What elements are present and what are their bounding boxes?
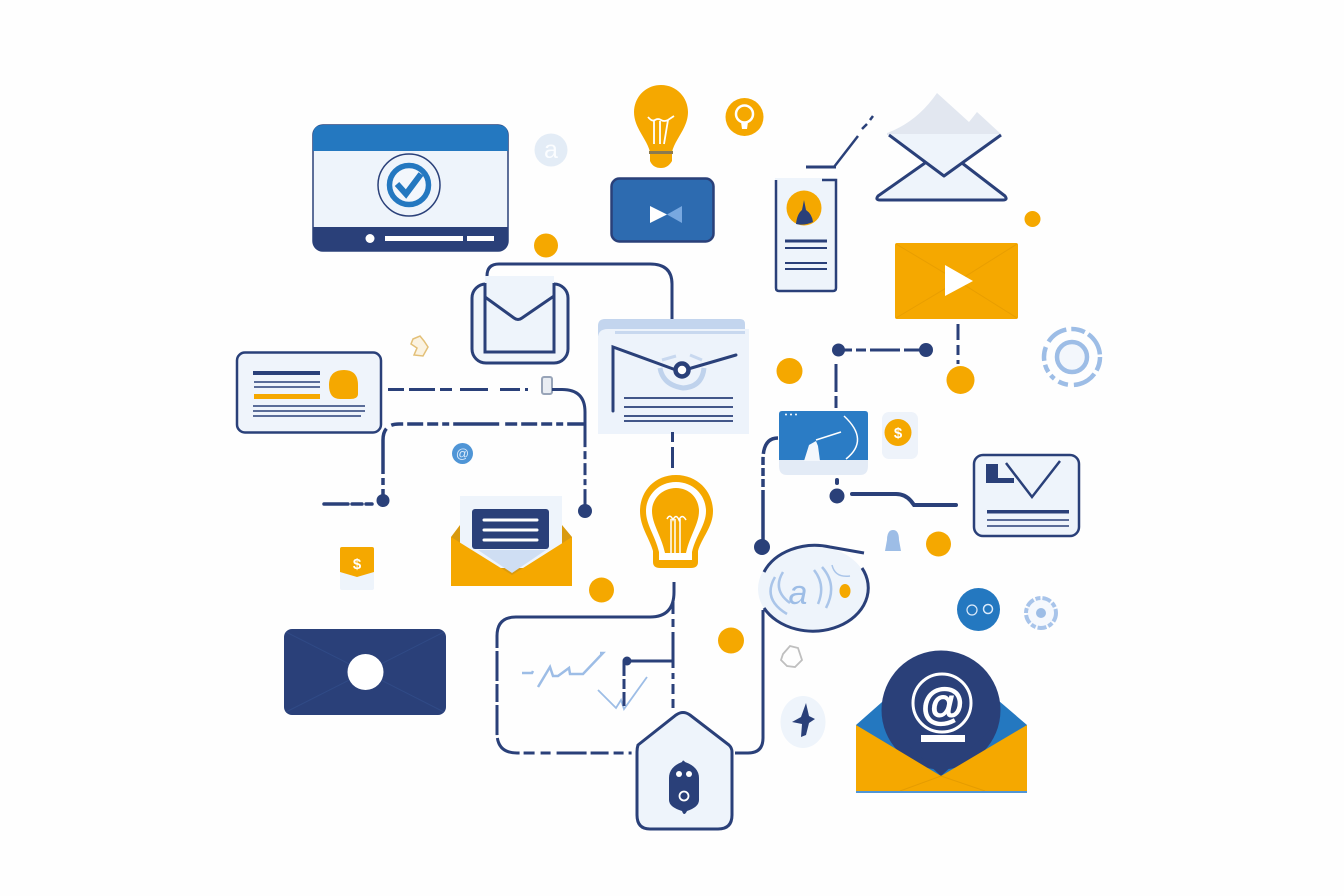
orange dot <box>946 366 974 394</box>
icon: outlined orange bulb <box>640 475 713 568</box>
icon: small plug <box>542 377 552 394</box>
icon: ring target <box>1044 329 1100 385</box>
connector: house to speech bubble <box>735 610 763 753</box>
panel: blue picture tile <box>779 411 868 475</box>
panel: profile card with orange avatar <box>237 352 381 432</box>
connector: horizontal node line <box>832 343 933 408</box>
panel: orange play envelope <box>895 243 1018 319</box>
orange dot <box>534 234 558 258</box>
icon: pale at-sign badge <box>534 134 568 166</box>
panel: speech bubble with at sign <box>758 545 868 632</box>
icon: small blue lock <box>885 530 901 551</box>
panel: center envelope document <box>598 319 749 434</box>
connector: dashed loop to house <box>497 636 632 753</box>
node: left connector <box>324 494 390 507</box>
node: connector to check card <box>830 480 956 505</box>
icon: dollar tag <box>340 547 374 590</box>
icon: doodle grey <box>781 646 802 667</box>
node: plug line end <box>578 504 592 518</box>
orange dot <box>926 532 951 556</box>
connector: vertical dashed from bulb to house <box>672 602 674 708</box>
icon: dollar coin tile <box>882 412 918 459</box>
orange dot <box>718 628 744 654</box>
icon: house with plug <box>637 712 732 829</box>
connector: loop from left node <box>383 424 585 500</box>
icon: tiny gold doodle <box>411 336 428 356</box>
icon: outlined envelope card <box>472 276 568 363</box>
panel: check card <box>974 455 1079 536</box>
connector: dashed line from center envelope to bulb <box>671 432 674 468</box>
connector: card to plug <box>388 388 528 391</box>
orange dot <box>1024 211 1040 227</box>
connector: small branch <box>622 656 672 706</box>
panel: speech bubble with at sign: a <box>789 574 807 612</box>
panel: blue video tile <box>612 178 714 242</box>
connector: bulb loop to lower left <box>497 582 674 636</box>
panel: navy envelope <box>284 629 446 715</box>
sketch: scribble chart <box>522 653 647 709</box>
icon: orange envelope with letter <box>451 496 572 586</box>
connector: plug down to node <box>552 390 585 510</box>
panel: big @ envelope: @ <box>921 680 963 729</box>
panel: big @ envelope <box>856 650 1027 793</box>
connector: play envelope to dot <box>956 324 960 364</box>
panel: phone card <box>775 116 873 291</box>
icon: pale gear <box>1026 598 1056 628</box>
panel: mountain envelope <box>877 93 1006 200</box>
icon: pale plane badge <box>780 696 826 748</box>
icon: dollar coin tile: $ <box>894 425 903 442</box>
icon: small bulb badge <box>726 98 764 136</box>
connector: top loop to center envelope <box>487 264 672 320</box>
panel: video window with check badge <box>313 125 508 251</box>
icon: pale at-sign badge: a <box>544 136 558 164</box>
orange dot <box>776 358 802 384</box>
node: bubble <box>754 539 770 555</box>
connector: up from bubble node <box>763 438 778 540</box>
icon: large orange light bulb <box>634 85 688 168</box>
icon: blue link badge <box>957 588 1000 631</box>
icon: small blue at badge <box>452 443 473 464</box>
icon: small blue at badge: @ <box>456 446 469 461</box>
orange dot <box>589 578 614 602</box>
icon: dollar tag: $ <box>353 556 362 573</box>
